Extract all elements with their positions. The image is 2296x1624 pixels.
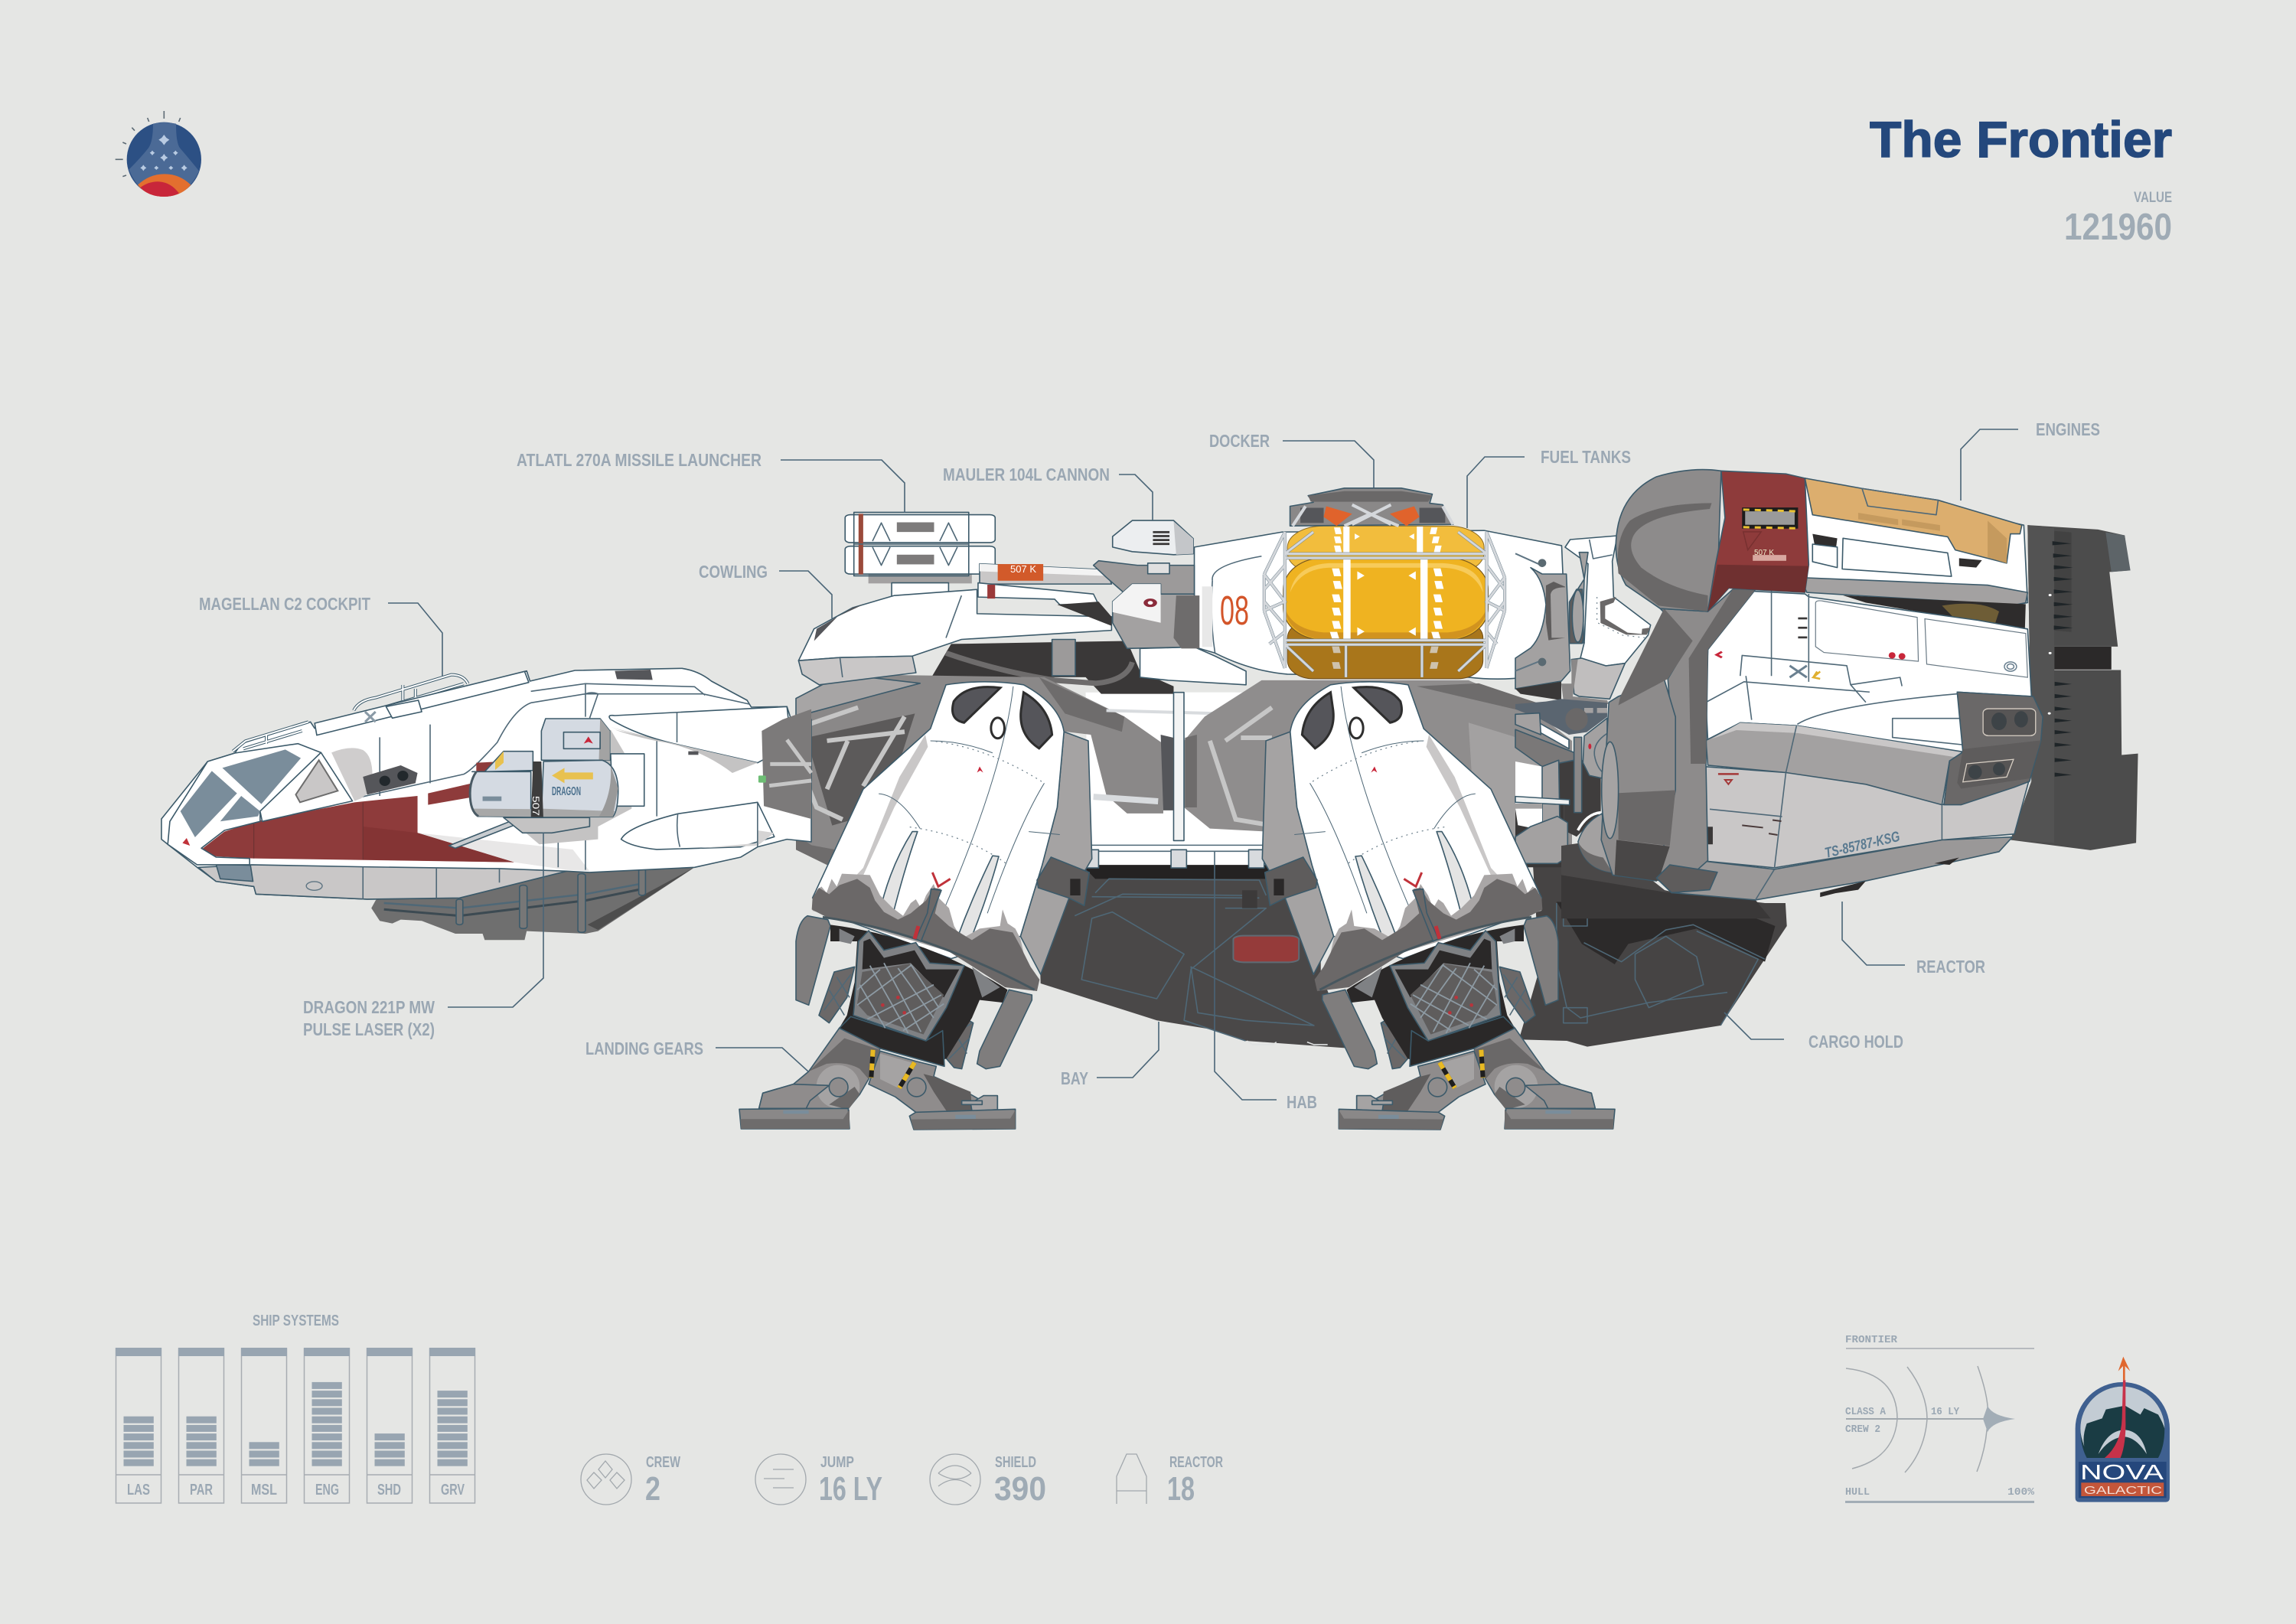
stat: crew: CREW	[646, 1454, 680, 1471]
lower cuff and landing leg	[739, 857, 1089, 1130]
panel: trajectory schematic: CREW 2	[1845, 1423, 1880, 1436]
stat: reactor	[1117, 1454, 1223, 1508]
bar: shd: SHD	[377, 1482, 401, 1498]
badge: nova galactic: GALACTIC	[2084, 1484, 2162, 1497]
lower white block	[1706, 591, 2031, 752]
bar: par	[178, 1348, 224, 1503]
centre strut	[1173, 693, 1184, 840]
bar: las	[116, 1348, 161, 1503]
lower bracket	[1571, 658, 1625, 699]
right engine pod and landing gear (mirrored)	[1262, 682, 1615, 1130]
bar: msl: MSL	[251, 1482, 277, 1498]
label: cargo hold: CARGO HOLD	[1808, 1032, 1903, 1052]
vent face	[853, 931, 964, 1041]
feet	[739, 1108, 850, 1129]
turret lower	[1113, 584, 1195, 648]
hood	[1616, 470, 1721, 611]
side meshes	[819, 967, 855, 1023]
engine and reactor section	[1561, 470, 2138, 918]
side window	[295, 760, 338, 802]
stat: jump: 16 LY	[819, 1470, 882, 1508]
cannon	[980, 564, 1111, 584]
stat: shield	[930, 1454, 1046, 1508]
grey bar	[1805, 578, 2027, 605]
logo: star emblem	[116, 111, 201, 197]
rear wheel hump	[1578, 814, 1613, 872]
panel: trajectory schematic	[1845, 1334, 2035, 1503]
bar: eng	[304, 1348, 350, 1503]
stat: crew: 2	[645, 1470, 660, 1508]
tank cage	[1264, 532, 1505, 677]
hub	[1515, 699, 1607, 735]
dragon marking: DRAGON	[552, 785, 581, 798]
ship systems heading: SHIP SYSTEMS	[253, 1313, 339, 1329]
label: landing gears: LANDING GEARS	[585, 1039, 703, 1058]
left strut frame	[796, 674, 1163, 868]
label: dragon pulse laser: PULSE LASER (X2)	[303, 1019, 435, 1039]
small wheel	[1583, 718, 1607, 779]
bar: grv	[429, 1348, 475, 1503]
label: mauler cannon: MAULER 104L CANNON	[943, 465, 1110, 484]
comet icon	[1983, 1406, 2015, 1432]
dark void	[931, 641, 1173, 694]
value label: VALUE	[2134, 190, 2172, 206]
white rear module	[1565, 536, 1651, 666]
leader lines	[388, 429, 2018, 1100]
label: cowling: COWLING	[699, 562, 768, 582]
label: atlatl missile launcher: ATLATL 270A MISSILE LAUNCHER	[517, 450, 762, 470]
ship serial text: TS-85787-KSG	[1823, 829, 1902, 862]
roof rails	[233, 675, 468, 752]
panel: trajectory schematic: 100%	[2007, 1486, 2035, 1498]
hazard stripes	[871, 1050, 915, 1088]
cockpit section	[161, 668, 811, 940]
grey band	[1706, 722, 1963, 805]
vent housing	[830, 925, 1008, 1061]
lower pod	[621, 802, 775, 850]
centre hull	[1195, 530, 1567, 679]
red housing	[1707, 471, 1808, 611]
bar: shd	[367, 1348, 413, 1503]
badge: nova galactic: NOVA	[2080, 1460, 2164, 1484]
belly rack	[371, 867, 695, 940]
engine dark block	[2011, 525, 2138, 850]
windshield panes	[223, 749, 301, 804]
stat: shield: 390	[994, 1470, 1046, 1508]
upper panel lines	[354, 683, 749, 798]
bar: eng: ENG	[315, 1482, 339, 1498]
tan armor	[1805, 478, 2022, 563]
rear shading	[611, 727, 758, 771]
cannon marking: 507 K	[1010, 563, 1036, 575]
panel: trajectory schematic: CLASS A	[1845, 1406, 1887, 1418]
hull marking 08: 08	[1220, 588, 1249, 634]
pod body	[813, 682, 1092, 974]
label: dragon pulse laser	[303, 997, 435, 1039]
spaceship cutaway illustration	[161, 470, 2138, 1130]
bay hull	[1037, 857, 1352, 1048]
bottom grey	[1656, 837, 2012, 900]
lower tank	[1287, 620, 1483, 679]
number 08 placeholder panel	[1202, 586, 1212, 647]
label: dragon pulse laser: DRAGON 221P MW	[303, 997, 435, 1017]
cuff	[812, 879, 1039, 991]
engine vents	[2053, 541, 2073, 777]
column	[1656, 589, 1756, 892]
stat: jump: JUMP	[820, 1454, 854, 1471]
rear connector module	[1515, 536, 1651, 867]
rear leg	[869, 1051, 997, 1112]
label: fuel tanks: FUEL TANKS	[1541, 447, 1631, 467]
dark window strip	[1843, 595, 2026, 628]
fins	[796, 916, 830, 1005]
panel: trajectory schematic: 16 LY	[1931, 1406, 1960, 1418]
vents on upper block	[1812, 534, 1838, 553]
cowling	[798, 589, 1111, 660]
grey underside panels	[198, 865, 566, 899]
missile launcher	[869, 574, 972, 583]
connector dark base	[1561, 840, 1771, 918]
left engine pod and landing gear	[739, 682, 1092, 1130]
label: engines: ENGINES	[2036, 419, 2100, 439]
label: bay: BAY	[1061, 1068, 1088, 1088]
stat: reactor: REACTOR	[1169, 1454, 1223, 1471]
ragged shadow edge	[813, 874, 1039, 980]
back tank	[1287, 526, 1484, 574]
upper white block	[1805, 478, 2027, 605]
right strut frame	[1184, 680, 1572, 868]
struts	[1540, 723, 1569, 748]
title: The Frontier	[1870, 111, 2172, 168]
reactor housing marking: 507 K	[1754, 549, 1774, 557]
tank straps	[1330, 527, 1443, 640]
central frame and body	[796, 488, 1572, 868]
turret upper	[1094, 561, 1195, 595]
cargo hold hull	[1519, 859, 1787, 1047]
dragon band marking: 507	[530, 796, 541, 816]
docker ring	[1290, 488, 1453, 526]
pod intakes	[952, 687, 1000, 722]
bar: grv: GRV	[441, 1482, 465, 1498]
dragon pulse laser	[518, 729, 631, 844]
canopy frame	[168, 744, 321, 865]
mid white bay	[1086, 693, 1272, 865]
stat: reactor: 18	[1167, 1470, 1195, 1508]
panel: trajectory schematic: HULL	[1845, 1486, 1870, 1498]
label: magellan c2 cockpit: MAGELLAN C2 COCKPIT	[199, 594, 370, 614]
panel: trajectory schematic: FRONTIER	[1845, 1334, 1898, 1346]
front tank	[1283, 558, 1488, 640]
rear interface	[762, 709, 811, 819]
label: hab: HAB	[1287, 1092, 1317, 1112]
light grey lower panel	[1698, 767, 2030, 868]
hull body	[161, 668, 811, 899]
red fuselage panel	[201, 796, 514, 863]
stat: jump	[755, 1454, 882, 1508]
bar: par: PAR	[190, 1482, 213, 1498]
value number: 121960	[2064, 207, 2172, 248]
stat: shield: SHIELD	[995, 1454, 1036, 1471]
serial side block	[1944, 692, 2043, 805]
clamp	[1037, 857, 1089, 905]
bar: msl	[241, 1348, 287, 1503]
big wheel	[1601, 679, 1675, 881]
label: reactor: REACTOR	[1916, 957, 1985, 977]
label: docker: DOCKER	[1209, 431, 1270, 451]
vent grid	[857, 964, 944, 1035]
badge: nova galactic	[2076, 1357, 2170, 1502]
camera block	[363, 765, 418, 794]
panel: ship systems	[116, 1313, 475, 1503]
canopy patch	[331, 748, 373, 801]
hull side shading	[1515, 568, 1570, 689]
stat: crew	[581, 1454, 680, 1508]
bar: las: LAS	[127, 1482, 150, 1498]
front leg	[759, 1028, 880, 1108]
